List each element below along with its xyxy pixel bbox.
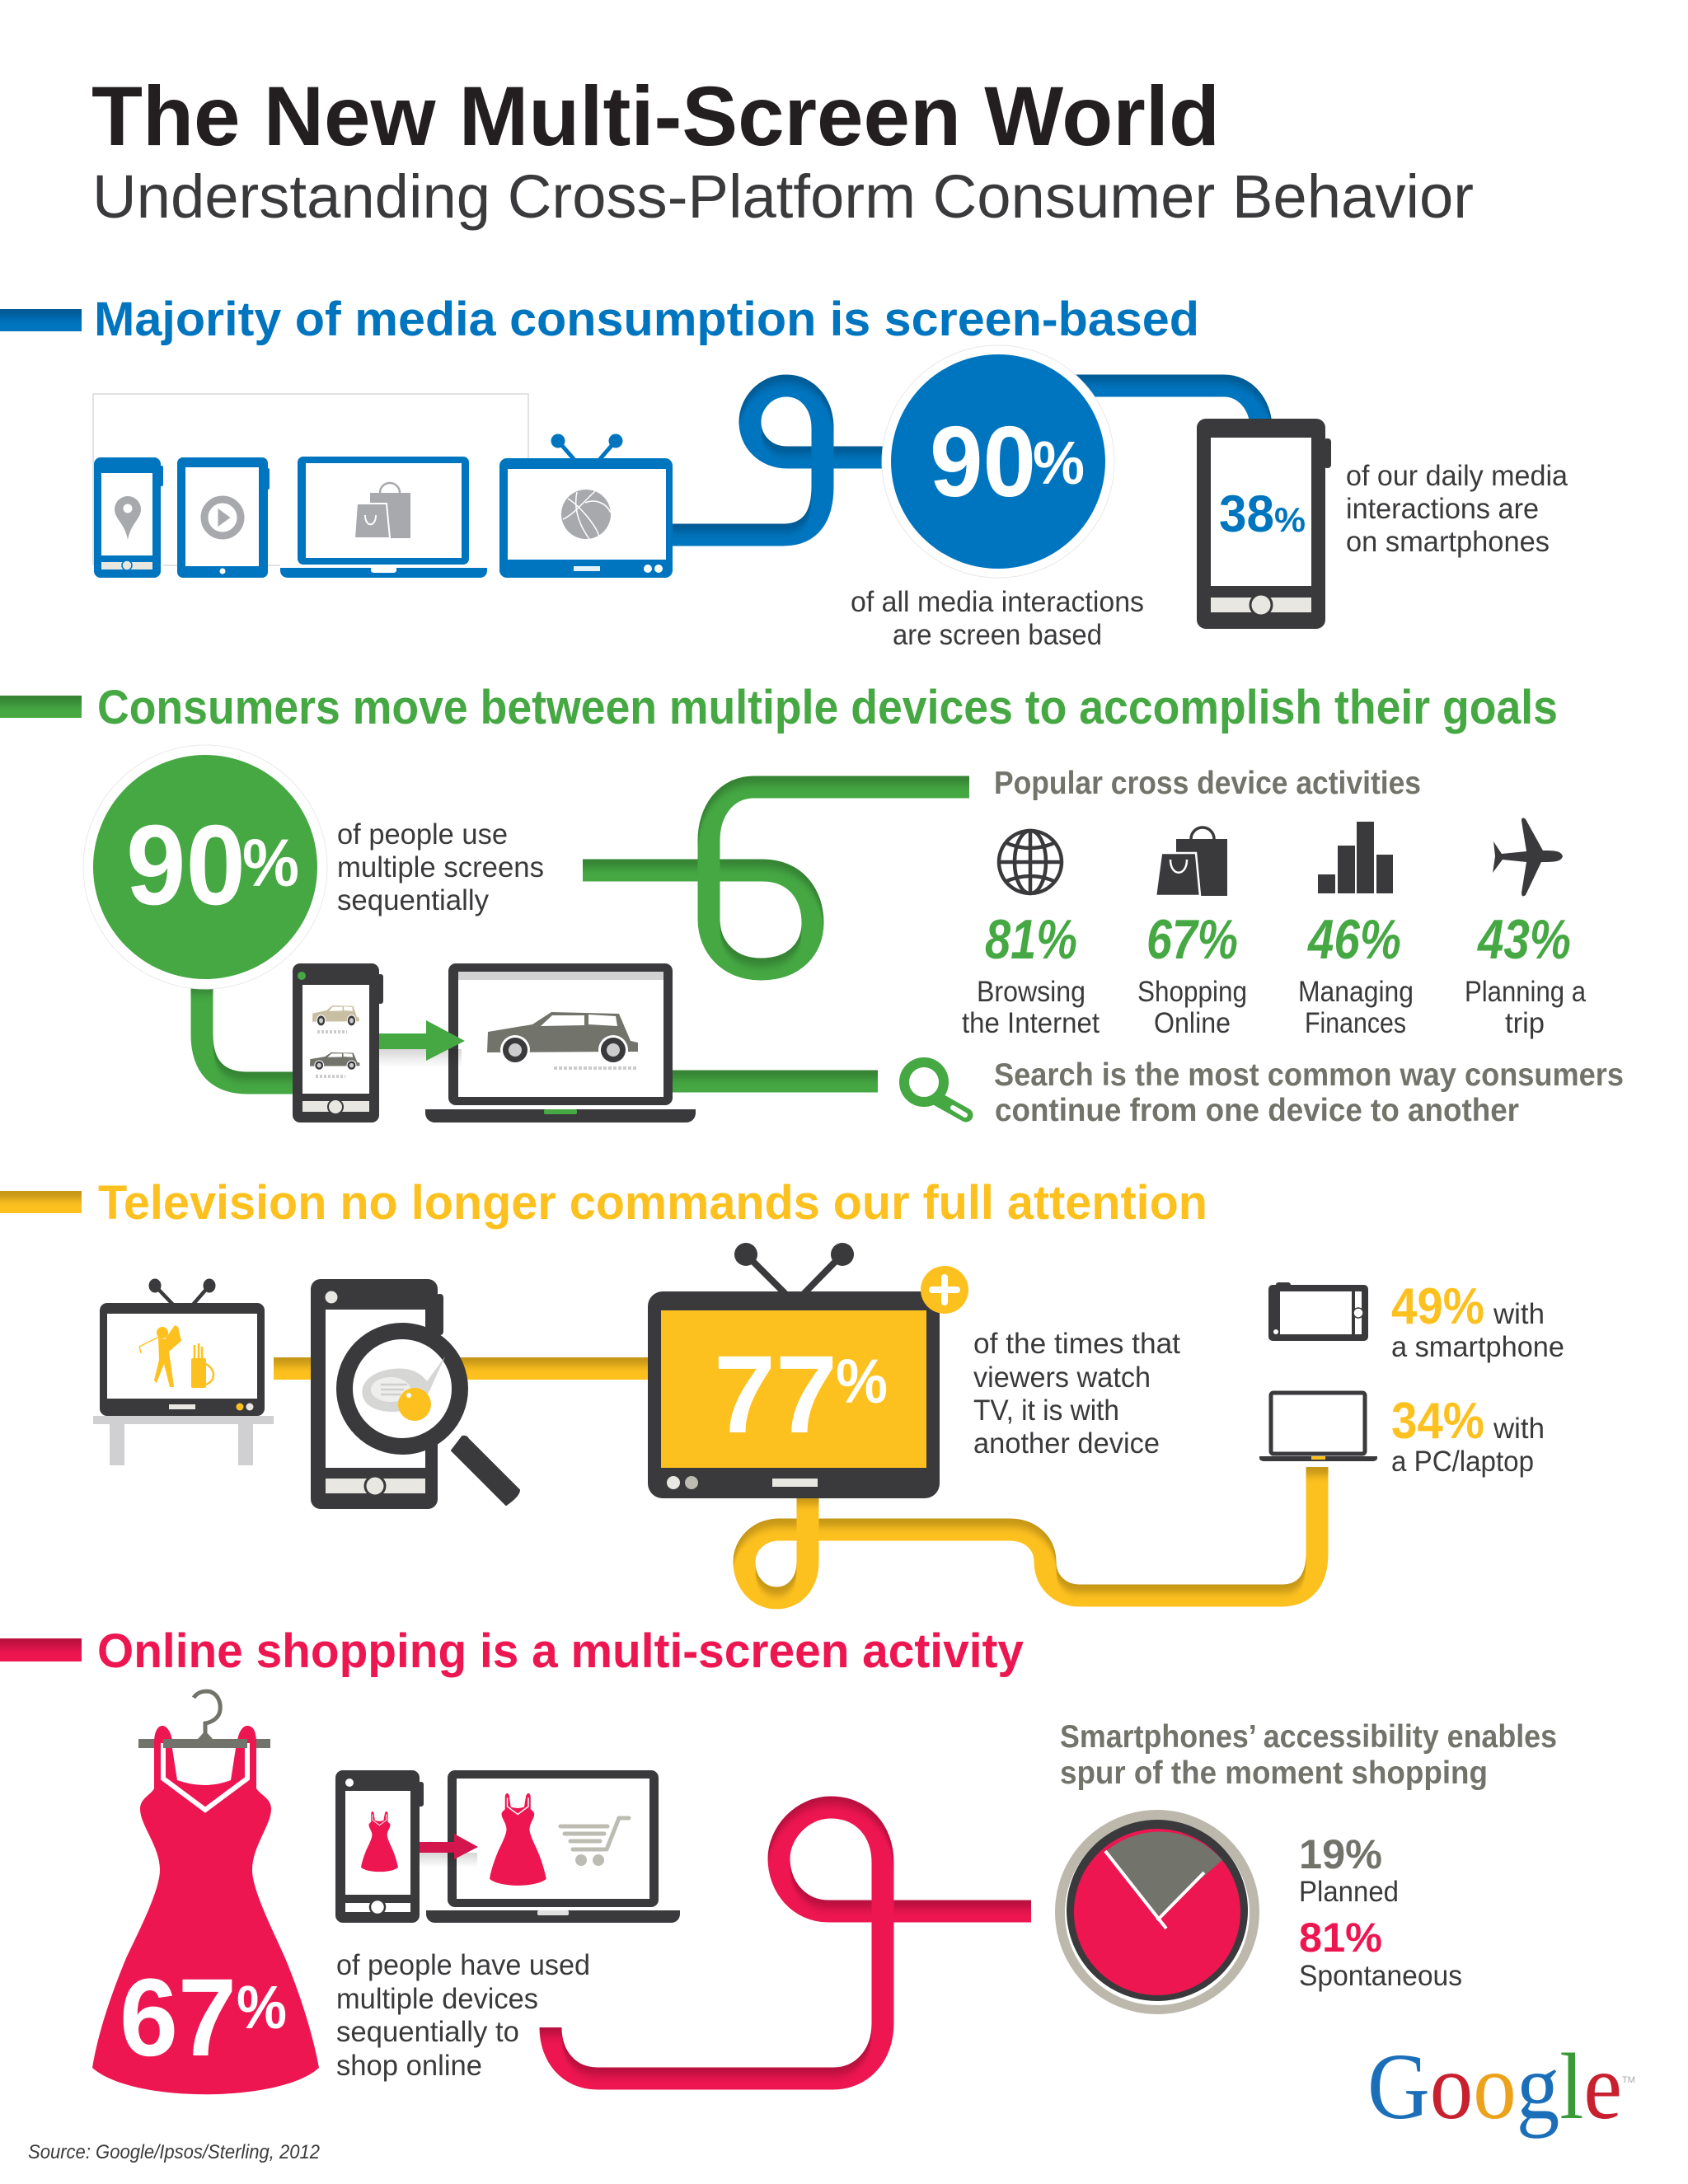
legend: planned: 19%: [1299, 1831, 1382, 1877]
heading bar: pink: [0, 1638, 82, 1661]
text: sequential shopping: sequentially to: [336, 2016, 519, 2048]
icon: phone with dress: [335, 1770, 424, 1923]
text: smartphones interactions: interactions are: [1346, 493, 1539, 525]
heading: television: Television no longer commands our full attention: [98, 1176, 1207, 1230]
heading bar: yellow: [0, 1191, 82, 1213]
activity: trip: 43%: [1476, 908, 1571, 971]
text: all media interactions: of all media interactions: [851, 586, 1144, 618]
text: search callout: [994, 1057, 1624, 1128]
panel: media consumption: [0, 293, 1568, 651]
stat circle: 90% use multiple screens: %: [242, 826, 299, 901]
stat circle: 90% use multiple screens: [83, 745, 327, 989]
icon: shopping bags: [1156, 827, 1227, 896]
connector tube: green laptop to search: [673, 1070, 878, 1093]
text: sequential shopping: [336, 1949, 590, 2082]
heading: online shopping: Online shopping is a multi-screen activity: [97, 1624, 1024, 1678]
text: multiple screens sequentially: [337, 818, 544, 916]
heading bar: blue: [0, 309, 82, 331]
icon: plus badge: [921, 1266, 968, 1314]
icon: TV with golfer on stand: [93, 1279, 274, 1465]
icon: dress on hanger with 67%: %: [237, 1973, 287, 2041]
connector tube: green circle to phone: [202, 985, 297, 1083]
activity: browsing: Browsing: [977, 976, 1085, 1008]
chart: clock pie 19/81: [1055, 1810, 1259, 2014]
logo: Google: TM: [1622, 2075, 1635, 2085]
icon: dress on hanger with 67%: [92, 1691, 319, 2094]
icon: laptop with shopping bags: [280, 457, 487, 578]
connector tube: yellow horizontal: [274, 1357, 648, 1380]
icon: bar chart: [1318, 822, 1393, 893]
stat: 49% smartphone: 49%: [1391, 1278, 1484, 1335]
text: with another device: viewers watch: [973, 1361, 1151, 1394]
activity: finances: Finances: [1305, 1007, 1406, 1039]
arrow: phone to laptop: [420, 1834, 478, 1868]
text: with another device: of the times that: [973, 1328, 1180, 1360]
legend: spontaneous: Spontaneous: [1299, 1960, 1462, 1992]
stat circle: 90% screen based: %: [1033, 429, 1085, 497]
subtitle: Understanding Cross-Platform Consumer Behavior: [92, 162, 1474, 231]
stat circle: 90% screen based: 90: [930, 405, 1036, 518]
icon: smartphone with 38%: 38: [1219, 485, 1274, 543]
panel: television attention: [0, 1176, 1564, 1598]
text: search callout: Search is the most common way consumers: [994, 1057, 1624, 1093]
text: smartphones interactions: on smartphones: [1346, 526, 1550, 558]
connector tube: yellow loop: [744, 1467, 1317, 1598]
icon: smartphone with 38%: %: [1274, 500, 1306, 539]
icon: dress on hanger with 67%: 67: [120, 1957, 237, 2079]
text: multiple screens sequentially: of people use: [337, 818, 508, 851]
activity: trip: Planning a: [1465, 976, 1586, 1008]
source note: Source: Google/Ipsos/Sterling, 2012: [28, 2141, 320, 2163]
icon: airplane: [1493, 818, 1563, 896]
icon: big TV with 77%: 77: [714, 1333, 837, 1456]
panel: online shopping: [0, 1624, 1635, 2163]
icon: phone with cars: [293, 963, 383, 1122]
text: popular activities heading: Popular cross device activities: [994, 766, 1421, 801]
icon: big TV with 77%: [648, 1243, 940, 1498]
connector tube: blue: [673, 386, 1261, 535]
icon: phone with magnifier: [311, 1279, 519, 1509]
legend: spontaneous: 81%: [1299, 1915, 1382, 1961]
text: smartphones interactions: of our daily media: [1346, 460, 1568, 492]
activity: finances: Managing: [1298, 976, 1414, 1008]
text: sequential shopping: multiple devices: [336, 1983, 538, 2015]
text: with another device: TV, it is with: [973, 1394, 1119, 1427]
text: with another device: another device: [973, 1427, 1160, 1460]
heading bar: green: [0, 696, 82, 718]
stat circle: 90% screen based: [882, 345, 1114, 578]
icon: laptop with dress and cart: [426, 1770, 680, 1923]
activity: browsing: 81%: [985, 908, 1077, 971]
icon: globe: [999, 831, 1062, 893]
arrow: phone to laptop: [379, 1020, 465, 1067]
stat: 49% smartphone: with: [1493, 1298, 1545, 1330]
stat: 49% smartphone: a smartphone: [1391, 1331, 1564, 1363]
legend: planned: [1299, 1831, 1399, 1908]
icon: TV with basketball: [499, 434, 673, 578]
text: sequential shopping: shop online: [336, 2050, 482, 2082]
activity: shopping: Shopping: [1137, 976, 1247, 1008]
text: all media interactions: are screen based: [893, 619, 1102, 651]
text: smartphones accessibility: Smartphones’ accessibility enables: [1060, 1719, 1557, 1755]
text: with another device: [973, 1328, 1180, 1460]
stat: 49% smartphone: [1391, 1278, 1564, 1363]
panel: multiple devices: [0, 681, 1624, 1128]
activity: finances: 46%: [1306, 908, 1401, 971]
connector tube: green loop: [583, 787, 969, 969]
icon: search magnifier: [904, 1062, 966, 1115]
legend: spontaneous: [1299, 1915, 1462, 1992]
activity: finances: [1298, 908, 1414, 1039]
heading: multiple devices: Consumers move between multiple devices to accomplish their goals: [97, 681, 1558, 734]
text: search callout: continue from one device to another: [995, 1093, 1519, 1128]
activity: shopping: Online: [1154, 1007, 1231, 1039]
logo: Google: Google: [1367, 2034, 1622, 2139]
title: The New Multi-Screen World: [91, 69, 1220, 163]
stat: 34% laptop: [1391, 1393, 1545, 1478]
icon: laptop outline: [1259, 1393, 1377, 1461]
icon: smartphone with map pin: [94, 457, 163, 578]
stat: 34% laptop: with: [1493, 1413, 1545, 1445]
icon: big TV with 77%: %: [836, 1347, 888, 1417]
activity: shopping: [1137, 908, 1247, 1039]
text: smartphones interactions: [1346, 460, 1568, 558]
stat: 34% laptop: 34%: [1391, 1393, 1484, 1450]
icon: smartphone landscape: [1268, 1282, 1368, 1341]
icon: smartphone with 38%: [1197, 419, 1331, 629]
faint frame: [93, 394, 528, 565]
activity: shopping: 67%: [1146, 908, 1238, 971]
activity: browsing: [962, 908, 1100, 1039]
text: all media interactions: [851, 586, 1144, 651]
stat circle: 90% use multiple screens: 90: [126, 802, 246, 929]
text: smartphones accessibility: [1060, 1719, 1557, 1791]
connector tube: pink: [551, 1807, 1031, 2079]
stat: 34% laptop: a PC/laptop: [1391, 1446, 1534, 1478]
activity: trip: [1465, 908, 1586, 1039]
text: multiple screens sequentially: multiple screens: [337, 851, 544, 883]
legend: planned: Planned: [1299, 1876, 1399, 1908]
icon: laptop with car: [425, 963, 696, 1122]
text: smartphones accessibility: spur of the moment shopping: [1060, 1755, 1488, 1791]
activity: trip: trip: [1505, 1007, 1545, 1039]
text: sequential shopping: of people have used: [336, 1949, 590, 1981]
text: multiple screens sequentially: sequentially: [337, 884, 489, 916]
activity: browsing: the Internet: [962, 1007, 1100, 1039]
heading: media consumption: Majority of media consumption is screen-based: [94, 293, 1199, 346]
icon: tablet with play button: [177, 457, 270, 578]
